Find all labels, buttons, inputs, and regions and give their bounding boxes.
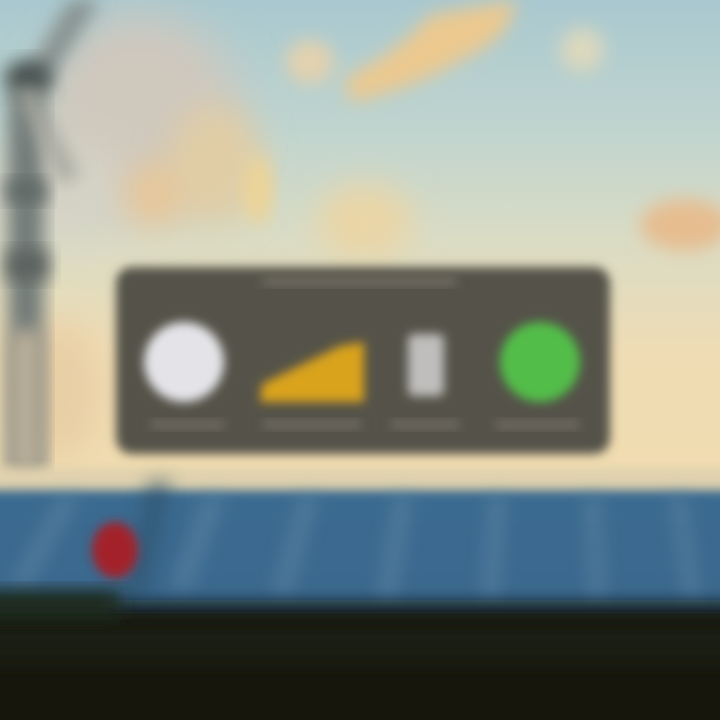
icon: green circle <box>500 322 580 402</box>
solar panels <box>0 480 720 630</box>
icon: battery <box>408 334 444 396</box>
panel: energy status <box>116 267 610 454</box>
clouds <box>0 0 720 460</box>
horizon band <box>0 468 720 492</box>
wind turbine <box>4 0 100 475</box>
panel heading <box>262 276 457 286</box>
icon: yellow rising wedge <box>260 342 364 402</box>
sky background <box>0 0 720 520</box>
dark foreground <box>0 590 720 720</box>
panel captions <box>150 420 580 429</box>
icon: white circle <box>144 322 224 402</box>
red marker <box>92 522 138 578</box>
